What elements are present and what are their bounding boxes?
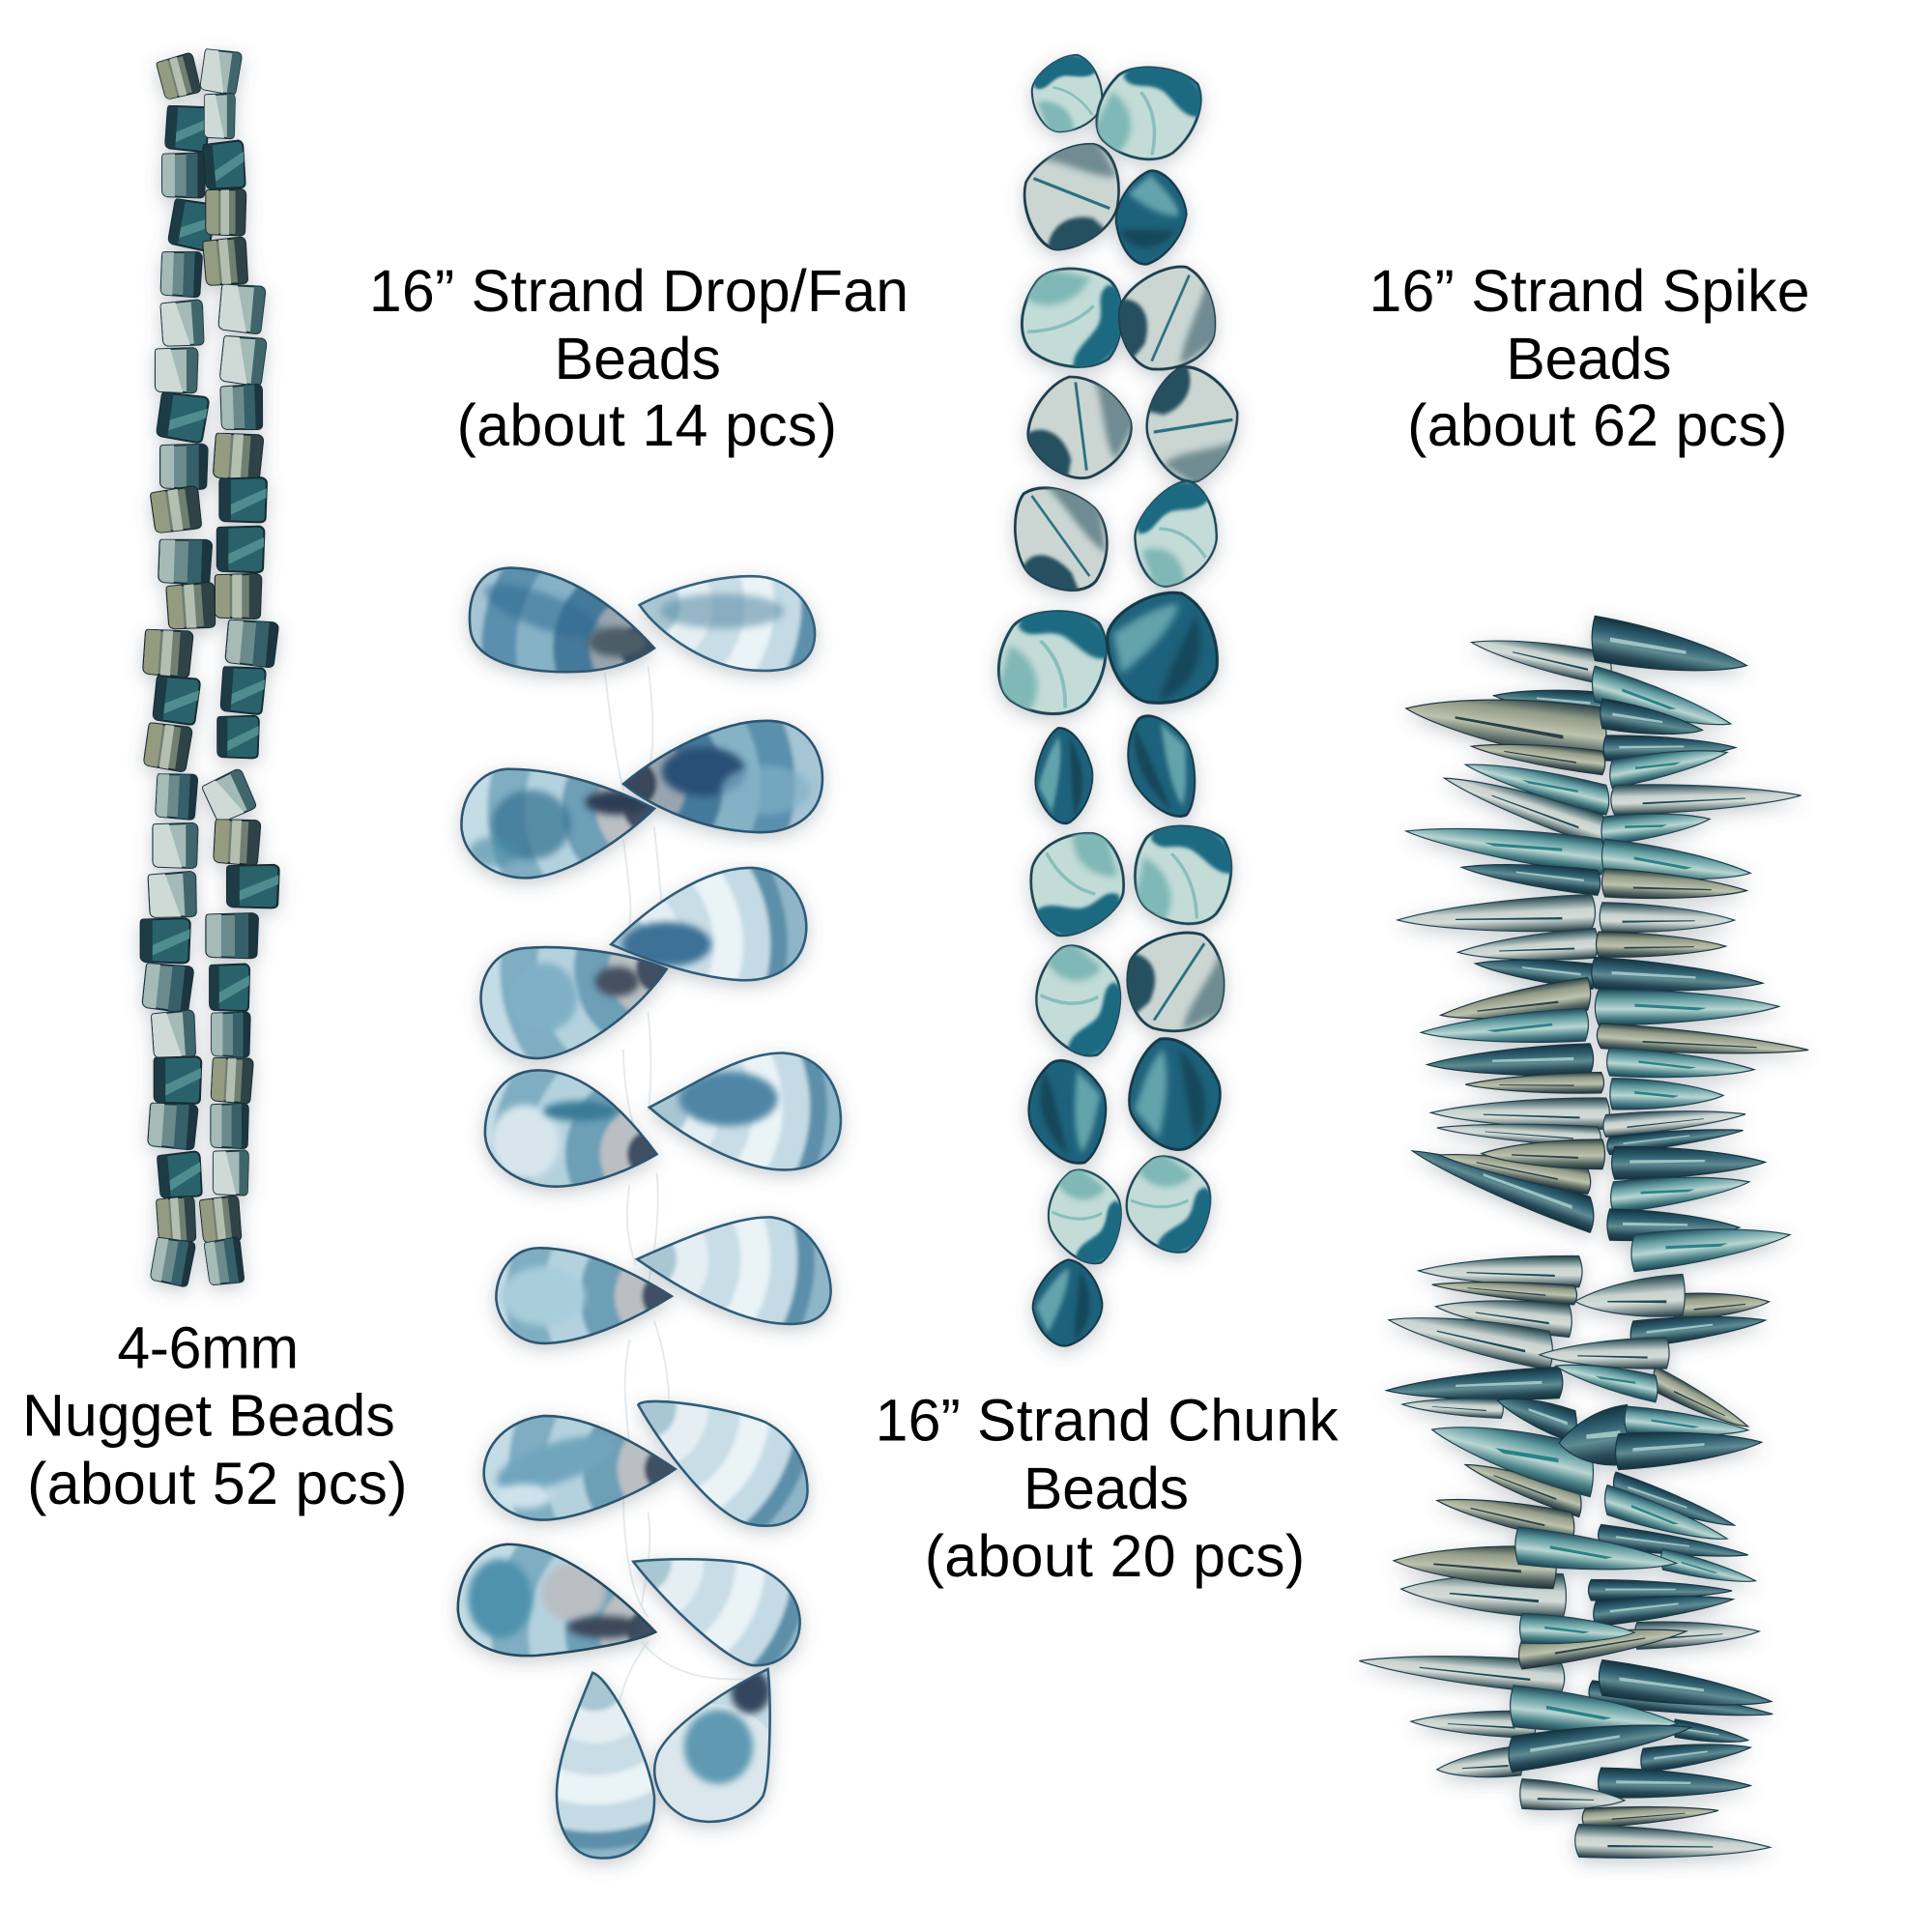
label: drop/fan beads: 16” Strand Drop/Fan: [369, 258, 908, 324]
drop beads, pair 7: [448, 1540, 810, 1678]
nugget strand right column: [199, 47, 279, 1287]
nugget strand left column: [141, 51, 217, 1288]
label: spike beads: 16” Strand Spike: [1370, 258, 1810, 324]
label: spike beads: Beads: [1506, 326, 1671, 391]
strand: nugget beads: [141, 47, 279, 1288]
label: chunk beads: 16” Strand Chunk: [876, 1388, 1339, 1454]
strand: spike beads: [1359, 616, 1808, 1864]
drop beads, pair 5: [487, 1212, 841, 1358]
spike strand upper left side: [1398, 627, 1611, 1234]
chunk strand right column: [1076, 45, 1255, 1260]
label: chunk beads: (about 20 pcs): [925, 1523, 1305, 1589]
strand: drop and fan beads: [448, 562, 851, 1873]
label: nugget beads: (about 52 pcs): [27, 1451, 408, 1516]
label: drop/fan beads: (about 14 pcs): [457, 392, 837, 458]
drop beads, pair 4: [476, 1048, 851, 1201]
drop beads, pair 1: [460, 562, 824, 687]
label: chunk beads: [876, 1388, 1339, 1589]
label: nugget beads: [22, 1314, 408, 1516]
label: spike beads: (about 62 pcs): [1407, 392, 1788, 458]
chunk strand left column: [969, 42, 1149, 1351]
strand: chunk beads: [969, 42, 1255, 1351]
drop beads, pair 2: [452, 715, 832, 893]
drop beads, pair 6: [475, 1397, 818, 1541]
spike strand lower left side: [1359, 1256, 1593, 1785]
drop beads, pair 8: [547, 1667, 780, 1873]
drop strand threads: [605, 667, 753, 1710]
label: nugget beads: Nugget Beads: [22, 1383, 395, 1449]
label: spike beads: [1370, 258, 1810, 458]
spike strand lower right side: [1509, 1274, 1773, 1864]
label: drop/fan beads: [369, 258, 908, 458]
label: drop/fan beads: Beads: [555, 326, 721, 391]
label: chunk beads: Beads: [1024, 1456, 1189, 1521]
label: nugget beads: 4-6mm: [117, 1314, 299, 1380]
spike strand upper right side: [1592, 616, 1808, 1272]
drop beads, pair 3: [472, 863, 816, 1071]
